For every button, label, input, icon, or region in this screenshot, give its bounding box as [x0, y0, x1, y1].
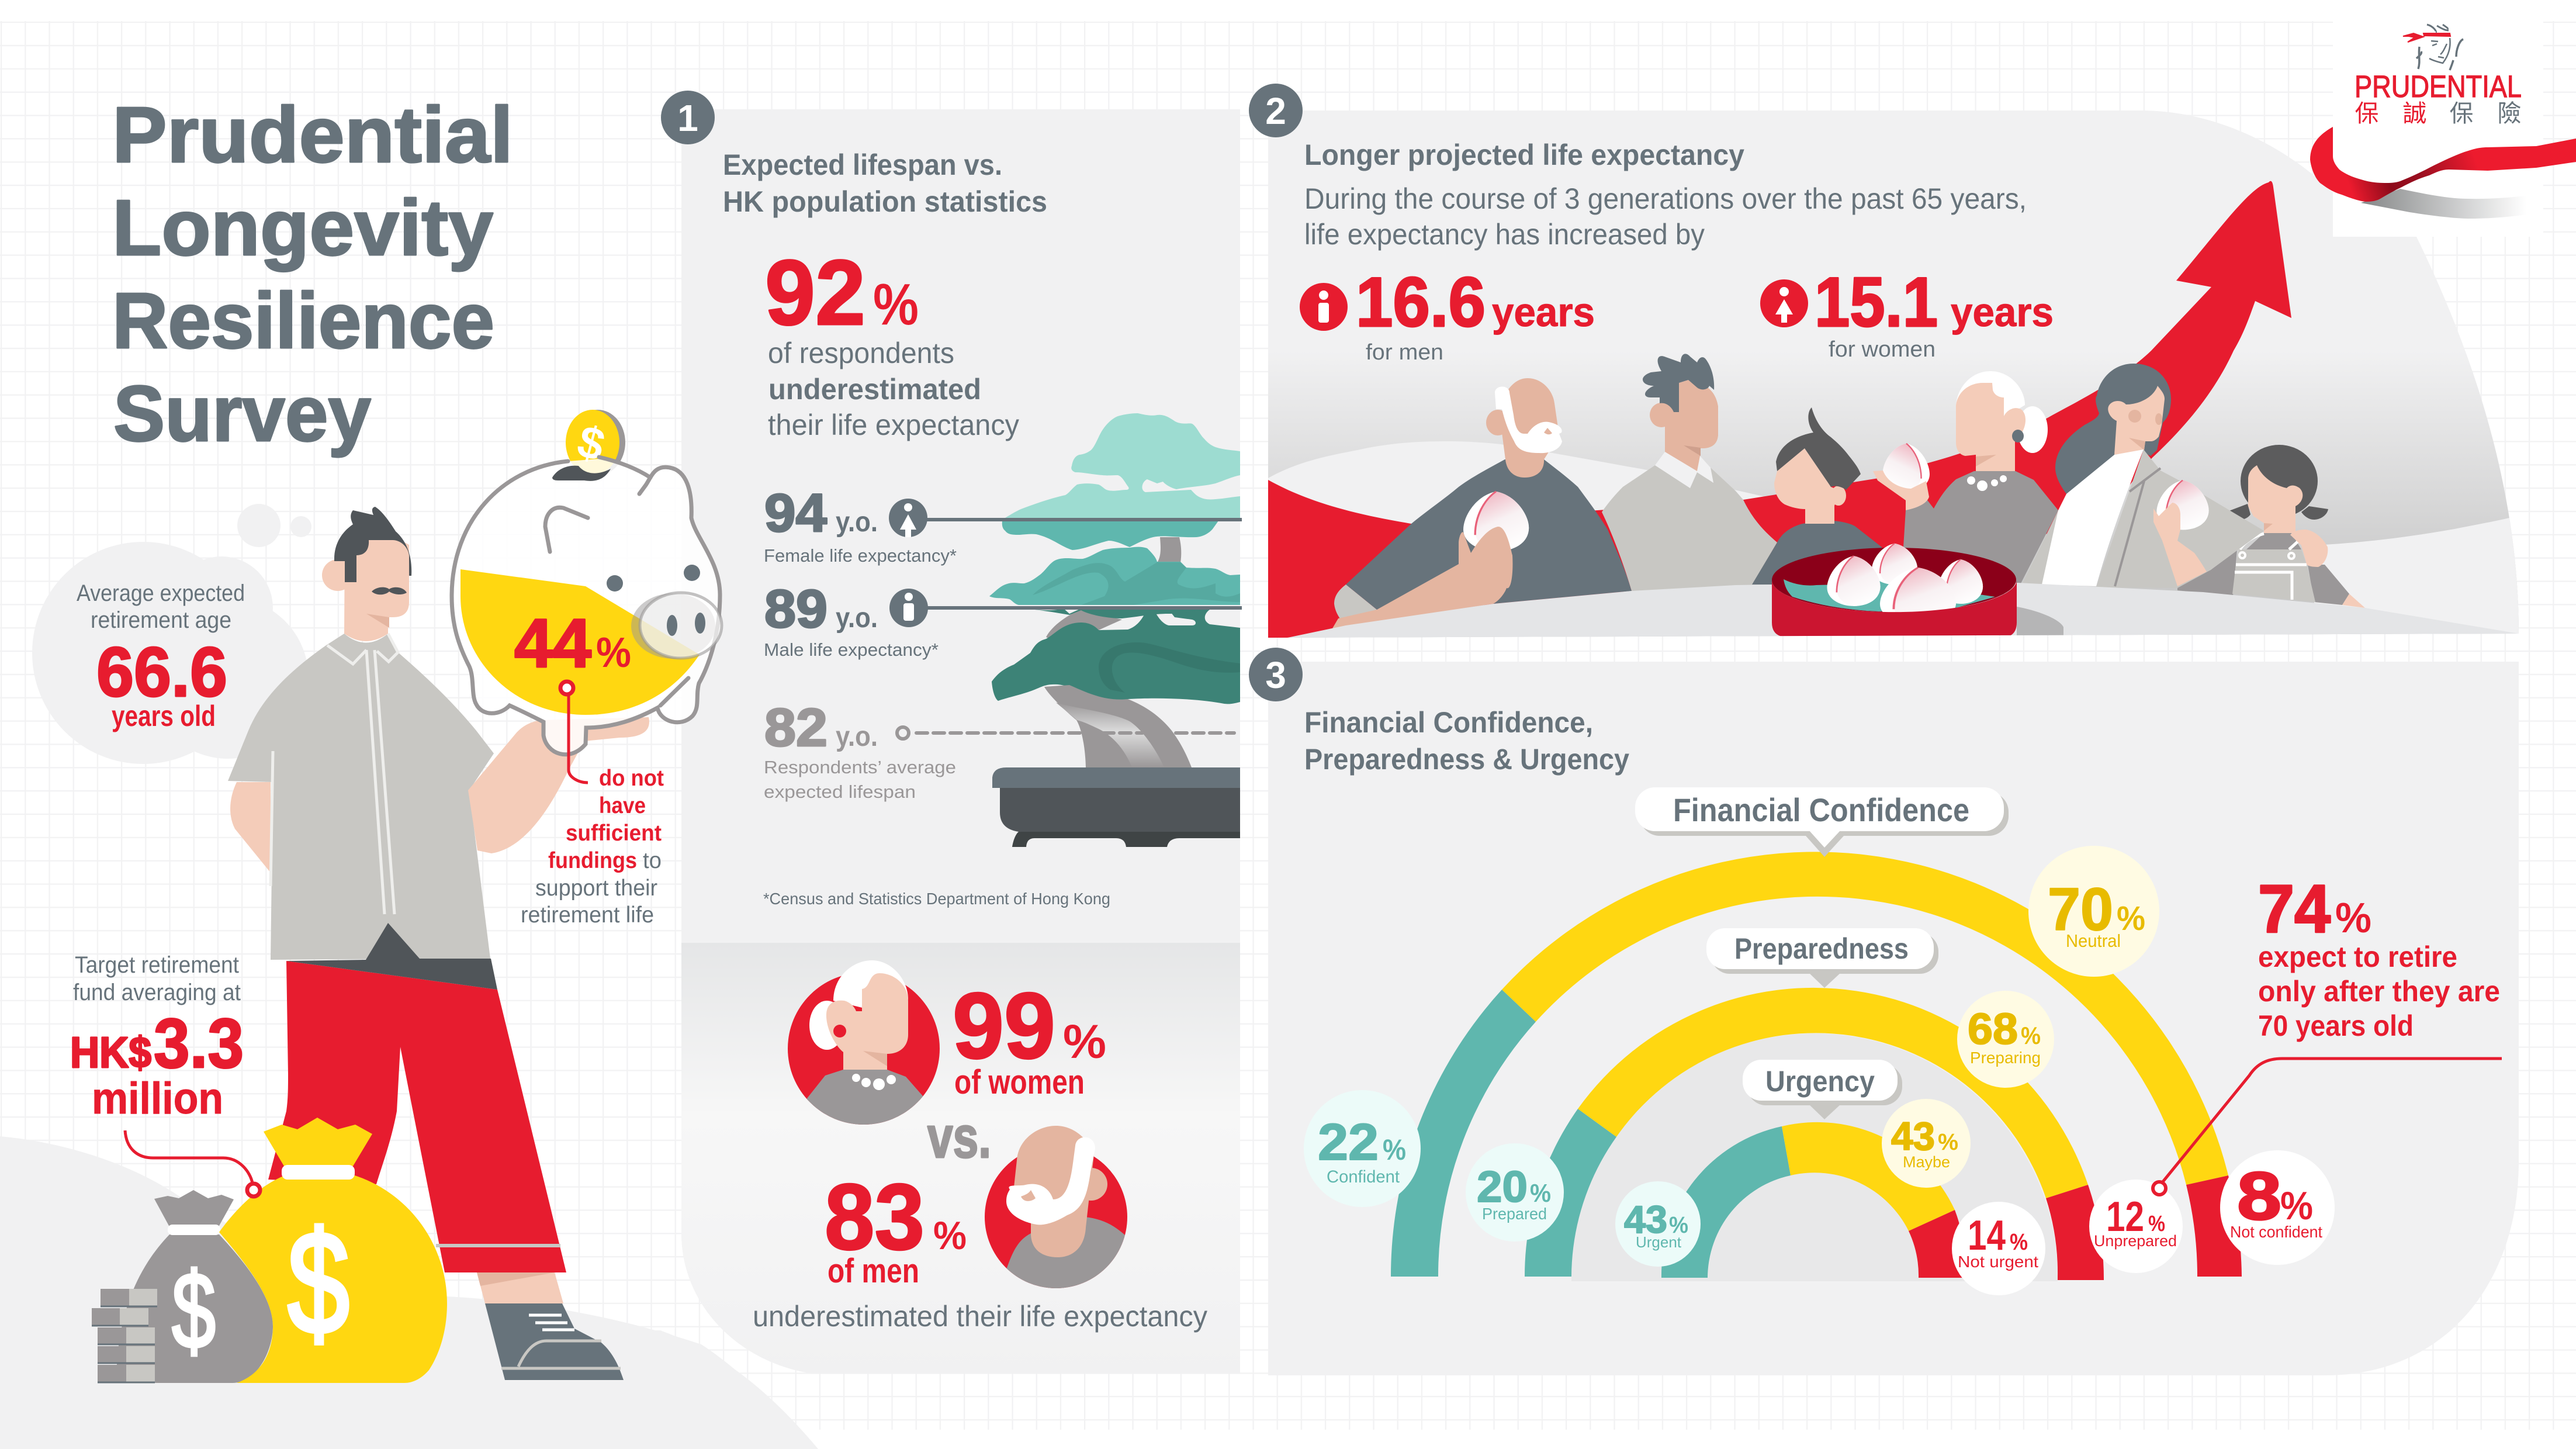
thought cloud: retirement age: years old — [112, 700, 216, 732]
canopy: dark tier — [992, 610, 1240, 704]
grandfather: arm — [1332, 527, 1512, 628]
piggy bank — [452, 410, 722, 755]
44 percent: % — [596, 630, 631, 676]
marker: respondents 82: expected lifespan — [764, 781, 916, 802]
trunk highlight — [1056, 703, 1164, 767]
pot feet — [1012, 832, 1240, 847]
canopy: mid tier shading — [1033, 562, 1240, 605]
text: retirement funding: fundings — [548, 848, 637, 873]
pig outline — [452, 457, 720, 755]
girl: hand — [2342, 594, 2365, 608]
girl: hand on chest — [2290, 530, 2328, 567]
bubble: 43 maybe: % — [1938, 1129, 1958, 1155]
portrait: older woman — [788, 960, 940, 1140]
stat: men 16.6 years: for men — [1366, 340, 1443, 365]
title: Resilience — [112, 276, 494, 365]
marker: female 94: Female life expectancy* — [764, 545, 957, 566]
bags: yellow money bag — [219, 1118, 447, 1383]
text: retirement funding: sufficient — [566, 821, 662, 846]
girl: right sleeve — [2308, 565, 2349, 605]
bubble: 8 not confident: 8 — [2237, 1158, 2281, 1234]
bubble: 8 not confident: % — [2280, 1184, 2313, 1228]
mother — [2022, 364, 2264, 588]
badge 2 — [1249, 84, 1303, 137]
label: Preparedness: Preparedness — [1734, 932, 1909, 965]
mother: hair — [2055, 364, 2171, 494]
caption: underestimated: underestimated their life expectancy — [753, 1300, 1207, 1333]
thought cloud: retirement age: 66.6 — [96, 633, 227, 711]
coin: $ — [572, 415, 610, 471]
grandfather: beard — [1495, 387, 1562, 453]
bags: grey money bag: $ — [172, 1251, 216, 1371]
badge 2: 2 — [1265, 90, 1286, 132]
mother: peach — [2156, 480, 2209, 530]
coin stack — [92, 1289, 157, 1383]
heading: section 3 — [1304, 706, 1629, 776]
callout: 74 percent — [2258, 871, 2500, 1042]
man: ankle shadow — [477, 1272, 555, 1286]
marker: respondents 82: 82 — [764, 698, 827, 758]
mother: cheeks — [2128, 410, 2162, 425]
marker: female 94 — [764, 483, 1242, 566]
44 percent: 44 — [514, 605, 591, 682]
label: Urgency — [1743, 1060, 1902, 1119]
bowl: teal filling — [1784, 579, 1995, 611]
stat: men 16.6 years — [1300, 263, 1595, 365]
badge 1: 1 — [677, 97, 698, 139]
marker: male 89: Male life expectancy* — [764, 639, 939, 660]
younger man: chin shadow — [1684, 445, 1701, 456]
44 percent — [514, 605, 631, 682]
pig eyes — [607, 565, 700, 592]
stat: 83 percent of men: % — [933, 1213, 967, 1258]
heading: section 1: HK population statistics — [723, 185, 1047, 218]
man: trousers — [268, 961, 566, 1272]
bubble: 68 preparing: % — [2021, 1022, 2041, 1049]
marker: male 89 — [764, 579, 1242, 660]
mother: coat — [2022, 449, 2264, 588]
bowl: peaches — [1827, 544, 1983, 625]
arcs: interior shading — [1571, 1033, 2058, 1281]
grandmother: blouse — [1903, 471, 2058, 585]
canopy: lower light tier — [1002, 521, 1218, 550]
stat: 99 percent of women — [953, 973, 1106, 1101]
text: target retirement fund: fund averaging at — [73, 980, 241, 1005]
heading: section 1 — [723, 148, 1047, 218]
younger man — [1602, 354, 1777, 591]
grandfather: peach — [1463, 492, 1529, 551]
bubble: 12 unprepared: % — [2148, 1212, 2165, 1236]
man: collar — [327, 634, 398, 664]
arc: urgency — [1661, 1122, 1965, 1278]
bubble: 43 maybe: 43 — [1891, 1114, 1935, 1158]
bubble: 70 neutral — [2028, 846, 2159, 977]
pig snout — [631, 593, 722, 659]
panel: section 1 upper background — [681, 109, 1240, 1374]
man: ear — [322, 559, 354, 591]
grandmother — [1873, 371, 2058, 585]
bubble: 43 urgent: Urgent — [1636, 1233, 1682, 1251]
grandmother: pearls — [1967, 475, 2007, 491]
bubble: 8 not confident: Not confident — [2230, 1223, 2322, 1241]
text: retirement funding: to — [643, 848, 662, 873]
bubble: 43 urgent: 43 — [1624, 1198, 1667, 1241]
text: target retirement fund: Target retirement — [75, 952, 239, 978]
grandmother: earring — [2012, 430, 2024, 442]
marker: respondents 82 — [764, 698, 1234, 802]
marker: respondents 82: Respondents’ average — [764, 757, 956, 777]
stat: 99 percent of women: 99 — [953, 973, 1055, 1078]
bubble: 14 not urgent: 14 — [1968, 1212, 2006, 1259]
logo: Chinese wordmark: 險 — [2498, 100, 2521, 127]
badge 1 — [661, 91, 715, 144]
head: hair — [2427, 25, 2449, 32]
marker: male 89: y.o. — [836, 603, 878, 634]
panel: section 1 lower background — [681, 943, 1240, 1374]
bubble: 14 not urgent: % — [2010, 1229, 2028, 1255]
man: trouser hem — [436, 1244, 560, 1247]
mother: neck and face — [2108, 386, 2165, 455]
bubble: 12 unprepared — [2089, 1180, 2183, 1273]
bubble: 14 not urgent — [1952, 1202, 2045, 1295]
stat: 92 percent: % — [873, 272, 919, 337]
stat: 99 percent of women: of women — [954, 1063, 1085, 1101]
bubble: 70 neutral: % — [2117, 900, 2145, 938]
man illustration — [228, 507, 649, 1380]
grandmother: neck shadow — [1976, 455, 1996, 466]
badge 3 — [1249, 648, 1303, 701]
title: Survey — [113, 369, 371, 458]
stat: women 15.1 years — [1760, 263, 2054, 362]
title: Longevity — [112, 184, 493, 272]
stat: 99 percent of women: % — [1063, 1015, 1106, 1068]
canopy: upper light tier — [1005, 413, 1240, 518]
man: shoe — [485, 1303, 624, 1380]
bubble: 20 prepared — [1466, 1143, 1564, 1241]
canopy: dark tier shading — [1099, 642, 1240, 693]
bubble: 12 unprepared: Unprepared — [2094, 1232, 2177, 1250]
arc: preparedness — [1525, 988, 2104, 1280]
head: face lines — [2429, 38, 2450, 63]
text: retirement funding — [521, 766, 664, 928]
callout pointer — [2153, 1059, 2502, 1195]
man: moustache — [372, 587, 407, 594]
pot body — [1000, 788, 1240, 832]
callout: 74 percent: % — [2335, 895, 2371, 942]
bubble: 20 prepared: Prepared — [1482, 1205, 1547, 1223]
logo: Chinese wordmark: 誠 — [2403, 100, 2426, 127]
bubble: 43 urgent — [1615, 1181, 1701, 1267]
ribbon: grey tail — [2361, 189, 2526, 219]
bubble: 8 not confident — [2220, 1150, 2335, 1265]
table — [1287, 583, 2519, 643]
logo: Chinese wordmark — [2355, 100, 2521, 127]
text: target retirement fund: million — [92, 1074, 223, 1123]
text: retirement funding: do not — [599, 766, 664, 791]
stat: 83 percent of men — [825, 1164, 967, 1290]
man: jaw shadow — [366, 614, 389, 628]
bubble: 70 neutral: Neutral — [2066, 931, 2121, 951]
stat: 92 percent: underestimated — [768, 373, 981, 406]
pig body fill — [452, 459, 720, 755]
marker: female 94: y.o. — [836, 507, 878, 538]
grandfather: sweater — [1346, 459, 1632, 610]
younger man: head and neck — [1665, 380, 1718, 472]
child — [1752, 407, 1888, 585]
man: waistband — [286, 923, 497, 990]
girl: overalls trim — [2235, 534, 2307, 600]
bubble: 68 preparing: 68 — [1968, 1004, 2018, 1053]
head: band — [2403, 33, 2450, 42]
man: right arm and hand — [468, 717, 649, 853]
marker: male 89: 89 — [764, 579, 827, 639]
bubble: 68 preparing: Preparing — [1970, 1049, 2041, 1067]
heading: section 2: During the course of 3 generations over the past 65 years, — [1304, 182, 2027, 215]
grandmother: hair bun — [2017, 406, 2048, 453]
bubble: 22 confident: 22 — [1318, 1113, 1379, 1171]
grandfather: head — [1502, 378, 1559, 478]
younger man: collar — [1655, 452, 1713, 488]
logo: Chinese wordmark: 保 — [2450, 100, 2473, 127]
mother: blouse — [2042, 449, 2144, 586]
girl: pigtails — [2226, 504, 2328, 520]
logo: helmeted head — [2403, 25, 2463, 70]
label: Financial Confidence — [1635, 787, 2009, 857]
man: hair — [334, 507, 411, 582]
grandfather: mouth — [1544, 428, 1552, 434]
bubble: 43 urgent: % — [1669, 1212, 1688, 1238]
bubble: 20 prepared: % — [1530, 1179, 1551, 1208]
thought cloud: retirement age: Average expected — [77, 580, 245, 606]
girl: left sleeve — [2177, 549, 2237, 596]
thought cloud: retirement age — [32, 504, 311, 764]
marker: female 94: 94 — [764, 483, 827, 543]
logo: ribbon — [2310, 127, 2576, 219]
arc: financial confidence — [1391, 852, 2242, 1277]
girl: hair — [2241, 445, 2318, 517]
canopy: mid tier — [989, 547, 1240, 605]
callout: 74 percent: 70 years old — [2258, 1009, 2414, 1042]
pot rim — [992, 767, 1240, 788]
text: target retirement fund: 3.3 — [154, 1004, 244, 1083]
logo: wordmark: PRUDENTIAL — [2355, 70, 2522, 104]
man: neck and face — [344, 536, 409, 641]
bowl: front — [1772, 580, 2017, 637]
bubble: 22 confident — [1304, 1090, 1421, 1207]
marker: respondents 82: y.o. — [836, 721, 878, 752]
stat: 83 percent of men: 83 — [825, 1164, 925, 1269]
stat: 83 percent of men: of men — [827, 1252, 919, 1290]
man: shirt — [228, 634, 494, 960]
bubble: 12 unprepared: 12 — [2106, 1194, 2144, 1240]
stat: 92 percent: 92 — [765, 241, 865, 344]
child: ear — [1831, 486, 1846, 506]
grandfather: ear — [1486, 410, 1509, 435]
child: neck and face — [1774, 448, 1841, 524]
panel: section 3 background — [1268, 662, 2519, 1375]
bowl shadow — [2017, 607, 2063, 636]
bubble: 14 not urgent: Not urgent — [1958, 1253, 2038, 1271]
text: target retirement fund: HK$ — [70, 1028, 151, 1077]
bags: grey money bag — [116, 1190, 273, 1383]
footnote: *Census and Statistics Department of Hong Kong — [763, 890, 1110, 908]
stat: women 15.1 years: years — [1951, 289, 2054, 335]
heading: section 3: Preparedness & Urgency — [1304, 743, 1629, 776]
connector to money bag — [125, 1130, 260, 1196]
callout: 74 percent: only after they are — [2258, 975, 2500, 1008]
text: retirement funding: support their — [535, 876, 657, 901]
head: caduceus — [2416, 39, 2463, 70]
ribbon: red band — [2310, 127, 2576, 202]
child: shirt — [1752, 521, 1888, 585]
younger man: hair — [1643, 354, 1714, 412]
portrait: older man — [985, 1126, 1140, 1298]
hill overlap corner — [643, 1330, 818, 1449]
girl: neck shadow — [2264, 523, 2273, 531]
younger man: sweater — [1602, 465, 1777, 591]
bubble: 68 preparing — [1957, 991, 2054, 1088]
stat: men 16.6 years: years — [1492, 289, 1595, 335]
bubble: 22 confident: % — [1383, 1133, 1406, 1166]
trunk — [1044, 685, 1192, 767]
bubble: 43 maybe: Maybe — [1903, 1153, 1950, 1171]
illustration: generations family — [1268, 181, 2519, 643]
younger man: ear — [1650, 403, 1673, 427]
heading: section 2: Longer projected life expectancy — [1304, 139, 1744, 171]
grandfather — [1332, 378, 1632, 628]
girl: face and neck — [2248, 465, 2303, 533]
grandmother: face and neck — [1956, 383, 2026, 471]
light mound right — [2314, 516, 2519, 634]
mother: neck shadow — [2129, 438, 2145, 450]
bubble: 70 neutral: 70 — [2048, 876, 2113, 943]
stat: women 15.1 years: 15.1 — [1815, 263, 1938, 341]
callout: 74 percent: expect to retire — [2258, 940, 2457, 973]
heading: section 2 — [1304, 139, 2027, 251]
mother: hand and arm — [2153, 503, 2207, 586]
light mound left — [1268, 441, 1765, 585]
pig savings fill — [461, 569, 700, 715]
upper trunk — [1157, 537, 1181, 563]
bowl — [1772, 544, 2017, 637]
pointer line — [560, 682, 588, 783]
text: target retirement fund — [70, 952, 244, 1123]
bonsai illustration — [989, 413, 1240, 847]
pig slot — [552, 466, 611, 481]
title — [112, 91, 513, 458]
callout: 74 percent: 74 — [2258, 871, 2331, 947]
heading: section 1: Expected lifespan vs. — [723, 148, 1002, 181]
stat: women 15.1 years: for women — [1829, 337, 1936, 362]
text: retirement funding: retirement life — [521, 902, 654, 928]
man: ankle — [477, 1272, 563, 1303]
label: Financial Confidence: Financial Confidence — [1673, 791, 1969, 828]
bubble: 20 prepared: 20 — [1477, 1162, 1528, 1211]
background hill — [0, 1136, 818, 1449]
stat: 92 percent: their life expectancy — [768, 409, 1019, 441]
bowl: inner — [1772, 548, 2016, 612]
label: Urgency: Urgency — [1765, 1065, 1875, 1098]
thought cloud: retirement age: retirement age — [91, 607, 231, 633]
grandmother: child peach and hand — [1873, 444, 1930, 510]
mother: lapel lines — [2115, 468, 2160, 586]
panel: section 2 background — [1268, 110, 2519, 638]
chart: rainbow arcs — [1391, 852, 2242, 1281]
girl: overall buttons — [2239, 552, 2294, 559]
branch — [1046, 610, 1122, 640]
heading: section 3: Financial Confidence, — [1304, 706, 1593, 739]
grandmother: hair — [1956, 371, 2025, 421]
grandfather: cuff — [1334, 585, 1377, 625]
logo panel — [2333, 21, 2543, 237]
stat: 92 percent: of respondents — [768, 337, 954, 369]
girl: overalls — [2232, 549, 2315, 602]
label: Preparedness — [1706, 928, 1938, 988]
man: shirt lines — [271, 650, 394, 914]
canopy: bottom sliver — [1036, 610, 1172, 618]
logo: Chinese wordmark: 保 — [2355, 100, 2378, 127]
title: Prudential — [112, 91, 513, 179]
stat: men 16.6 years: 16.6 — [1356, 263, 1486, 341]
bubble: 22 confident: Confident — [1327, 1167, 1400, 1187]
background gradient — [1268, 351, 2519, 643]
bubble: 43 maybe — [1882, 1099, 1971, 1188]
coin — [566, 410, 625, 475]
vs label: vs. — [927, 1105, 991, 1170]
man: left arm — [230, 782, 271, 873]
bags: yellow money bag: $ — [288, 1201, 349, 1364]
child: hair — [1776, 407, 1861, 490]
stat: 92 percent — [765, 241, 1019, 441]
text: retirement funding: have — [599, 793, 646, 818]
badge 3: 3 — [1265, 654, 1286, 696]
girl — [2177, 445, 2365, 608]
heading: section 2: life expectancy has increased by — [1304, 218, 1705, 251]
girl: bib top — [2246, 533, 2301, 549]
red growth arrow — [1268, 181, 2291, 638]
